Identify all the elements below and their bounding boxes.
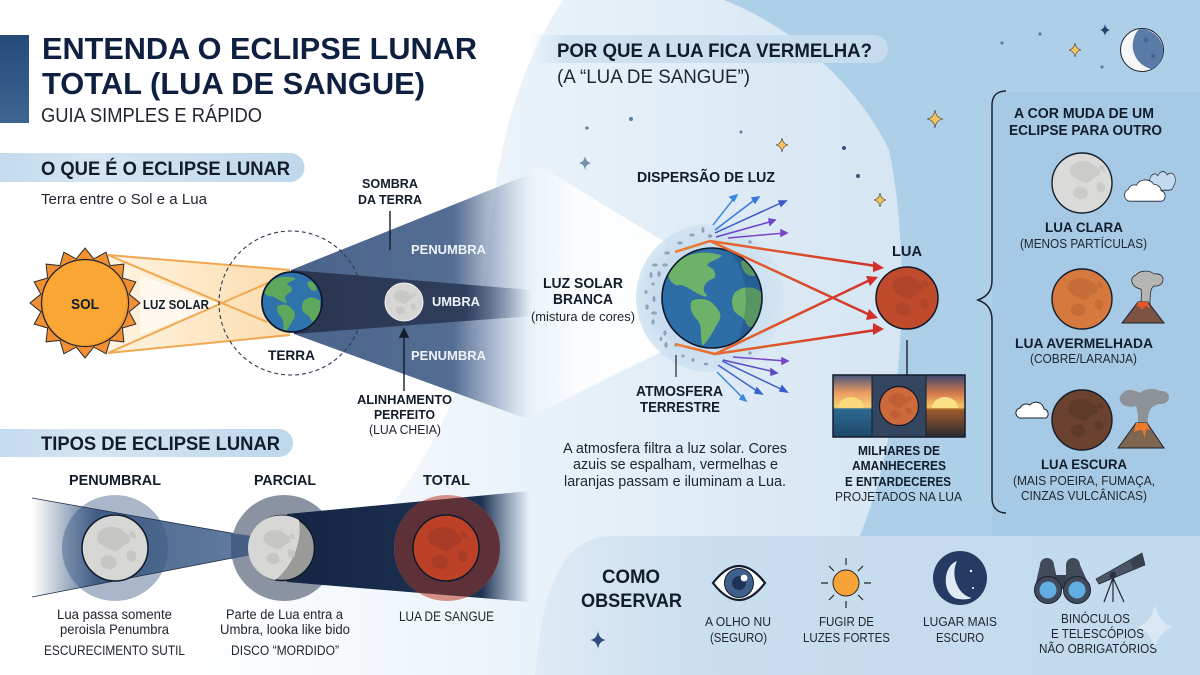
- caption: milhares de amanheceres: E ENTARDECERES: [845, 475, 951, 489]
- heading: a cor muda: A COR MUDA DE UM: [1014, 106, 1154, 122]
- penumbral halo: [62, 495, 168, 601]
- label: fugir de luzes fortes: [803, 614, 890, 645]
- label: terra: TERRA: [268, 347, 315, 363]
- label: lua: LUA: [892, 244, 923, 260]
- eclipse type: penumbral: [32, 472, 248, 658]
- icon: small cloud: [1016, 402, 1048, 418]
- arrows: refracted red and orange light: [675, 241, 876, 354]
- label: sombra da terra: SOMBRA: [362, 176, 419, 191]
- image strip: sunrises and sunsets: [833, 375, 965, 437]
- diagram: atmosphere halo: [636, 224, 784, 372]
- icon: clear moon: [1052, 153, 1112, 213]
- label: luz solar branca: [531, 276, 635, 324]
- title: ENTENDA O ECLIPSE LUNAR: [42, 31, 477, 66]
- label: luz solar: LUZ SOLAR: [143, 298, 209, 312]
- icon: full moon in umbra: [385, 283, 423, 321]
- label: dispersão de luz: DISPERSÃO DE LUZ: [637, 168, 775, 186]
- icon: small volcano: [1122, 271, 1164, 323]
- arrows: scattered blue light up: [713, 195, 787, 238]
- label: lua clara: (MENOS PARTÍCULAS): [1020, 236, 1147, 251]
- parcial caption: Parte de Lua entra a: [226, 607, 343, 622]
- label: binóculos e telescópios: NÃO OBRIGATÓRIOS: [1039, 641, 1157, 656]
- icon: bright sun: [821, 558, 871, 608]
- panel: como observar: [535, 536, 1200, 675]
- penumbral caption: ESCURECIMENTO SUTIL: [44, 643, 185, 658]
- icon: crescent moon: [1120, 28, 1164, 72]
- title block: [0, 31, 477, 127]
- sun label: SOL: [71, 296, 99, 313]
- label: lua escura: (MAIS POEIRA, FUMAÇA,: [1013, 473, 1155, 488]
- penumbral caption: Lua passa somente: [57, 607, 172, 622]
- heading: como observar: COMO: [602, 567, 660, 588]
- labels: penumbra and umbra: [411, 242, 487, 363]
- parcial caption: Umbra, looka like bido: [220, 622, 350, 637]
- icon: eye: [713, 566, 765, 600]
- panel: white sunlight cone: [530, 160, 665, 417]
- heading: por que a lua fica vermelha: POR QUE A LUA FICA VERMELHA?: [557, 41, 872, 62]
- label: binóculos e telescópios: BINÓCULOS: [1061, 611, 1130, 626]
- label: lua avermelhada: LUA AVERMELHADA: [1015, 335, 1153, 351]
- icon: large earth: [662, 248, 765, 348]
- penumbral moon: [82, 515, 148, 581]
- icon: red moon: [876, 267, 938, 329]
- parcial label: PARCIAL: [254, 472, 316, 489]
- eclipse type: total: [394, 472, 500, 624]
- penumbral caption: peroisla Penumbra: [60, 622, 169, 637]
- heading: como observar: [581, 567, 682, 612]
- labels: penumbra and umbra: PENUMBRA: [411, 348, 487, 363]
- text: atmosphere explanation: A atmosfera filtra a luz solar. Cores: [563, 441, 787, 457]
- bracket: [978, 91, 1006, 513]
- diagram: dashed orbit circle: [219, 231, 363, 375]
- diagram: atmosphere particles: [645, 227, 752, 365]
- total halo: [394, 495, 500, 601]
- icon: binoculars: [1034, 558, 1090, 604]
- label: atmosfera terrestre: [636, 355, 723, 416]
- label: binóculos e telescópios: E TELESCÓPIOS: [1051, 626, 1144, 641]
- label: sombra da terra: DA TERRA: [358, 192, 423, 207]
- label: a olho nu: A OLHO NU: [705, 614, 771, 629]
- eclipse type: parcial: [220, 472, 530, 658]
- label: lua clara: LUA CLARA: [1045, 219, 1123, 235]
- text: atmosphere explanation: azuis se espalham, vermelhas e: [573, 457, 778, 473]
- caption: milhares de amanheceres: PROJETADOS NA LUA: [835, 489, 962, 504]
- icon: large volcano: [1118, 389, 1169, 448]
- heading: o que é o eclipse lunar: [0, 153, 304, 182]
- parcial caption: DISCO “MORDIDO”: [231, 643, 339, 658]
- label: alinhamento perfeito: ALINHAMENTO: [357, 392, 452, 407]
- arrow: alinhamento to moon: [400, 329, 408, 391]
- label: lua clara: [1020, 219, 1147, 251]
- label: alinhamento perfeito: PERFEITO: [374, 407, 435, 422]
- label: a olho nu: [705, 614, 771, 645]
- icon: dark moon: [1052, 390, 1112, 450]
- heading: como observar: OBSERVAR: [581, 591, 682, 612]
- parcial caption: [220, 607, 350, 658]
- label: sombra da terra: [358, 176, 423, 250]
- icon: earth: [262, 272, 322, 332]
- label: a olho nu: (SEGURO): [710, 630, 767, 645]
- label: binóculos e telescópios: [1039, 611, 1157, 656]
- diagram: penumbra shadow: [291, 174, 530, 420]
- label: atmosfera terrestre: TERRESTRE: [640, 400, 720, 416]
- heading: tipos de eclipse lunar: TIPOS DE ECLIPSE LUNAR: [41, 434, 280, 455]
- heading: por que a lua fica vermelha: [531, 35, 888, 63]
- text: atmosphere explanation: laranjas passam e iluminam a Lua.: [564, 474, 786, 490]
- arrows: scattered blue light down: [717, 357, 788, 401]
- label: lua escura: [1013, 456, 1155, 503]
- penumbral caption: [44, 607, 185, 658]
- icon: sun: [30, 248, 140, 358]
- panel: colour variation backdrop: [992, 92, 1200, 537]
- label: luz solar branca: LUZ SOLAR: [543, 276, 624, 292]
- icon: telescope: [1096, 553, 1145, 602]
- total caption: LUA DE SANGUE: [399, 609, 494, 624]
- caption: milhares de amanheceres: AMANHECERES: [852, 459, 946, 473]
- title accent bar: [0, 35, 29, 123]
- arrowheads: red light: [866, 261, 884, 335]
- label: alinhamento perfeito: [357, 392, 452, 437]
- label: luz solar branca: BRANCA: [553, 292, 613, 308]
- penumbral label: PENUMBRAL: [69, 472, 161, 489]
- title: [42, 31, 477, 101]
- label: lua escura: LUA ESCURA: [1041, 456, 1127, 472]
- decorative stars: [579, 24, 1110, 207]
- heading: tipos de eclipse lunar: [0, 429, 293, 457]
- label: alinhamento perfeito: (LUA CHEIA): [369, 422, 441, 437]
- subheading: a lua de sangue: (A “LUA DE SANGUE”): [557, 67, 750, 88]
- labels: penumbra and umbra: PENUMBRA: [411, 242, 487, 257]
- connector: moon to sunsets: [906, 340, 908, 375]
- label: lua avermelhada: (COBRE/LARANJA): [1030, 351, 1137, 366]
- icon: reddish moon: [1052, 269, 1112, 329]
- caption: milhares de amanheceres: [835, 444, 962, 504]
- label: lugar mais escuro: [923, 614, 997, 645]
- label: lugar mais escuro: ESCURO: [936, 630, 984, 645]
- title: TOTAL (LUA DE SANGUE): [42, 66, 425, 101]
- subheading: terra entre o sol e a lua: Terra entre o Sol e a Lua: [41, 191, 208, 208]
- parcial halo: [231, 495, 337, 601]
- icon: navy star: [590, 631, 606, 649]
- total halo inside shadow: [394, 495, 500, 601]
- parcial moon: [248, 515, 314, 580]
- penumbral shadow wedge: [32, 498, 248, 597]
- icon: night sky: [933, 551, 987, 605]
- diagram: umbra shadow: [291, 270, 532, 334]
- label: fugir de luzes fortes: FUGIR DE: [819, 614, 874, 629]
- heading: o que é o eclipse lunar: O QUE É O ECLIPSE LUNAR: [41, 158, 290, 180]
- heading: a cor muda: [1009, 106, 1162, 139]
- caption: milhares de amanheceres: MILHARES DE: [858, 444, 940, 458]
- label: lua escura: CINZAS VULCÂNICAS): [1021, 488, 1147, 503]
- label: atmosfera terrestre: ATMOSFERA: [636, 384, 723, 400]
- subtitle: GUIA SIMPLES E RÁPIDO: [41, 104, 262, 127]
- label: fugir de luzes fortes: LUZES FORTES: [803, 630, 890, 645]
- labels: penumbra and umbra: UMBRA: [432, 294, 481, 309]
- diagram: sunlight beams: [108, 255, 290, 353]
- link wedge: [231, 533, 252, 559]
- background: right blue area: [724, 0, 1200, 675]
- parcial shadow wedge: [287, 491, 530, 602]
- heading: a cor muda: ECLIPSE PARA OUTRO: [1009, 123, 1162, 139]
- icon: clouds: [1125, 172, 1175, 201]
- total moon: [413, 515, 479, 581]
- label: lugar mais escuro: LUGAR MAIS: [923, 614, 997, 629]
- label: lua avermelhada: [1015, 335, 1153, 366]
- text: atmosphere explanation: [563, 441, 787, 490]
- icon: large pale star: [1137, 605, 1173, 649]
- total label: TOTAL: [423, 472, 470, 489]
- label: luz solar branca: (mistura de cores): [531, 310, 635, 324]
